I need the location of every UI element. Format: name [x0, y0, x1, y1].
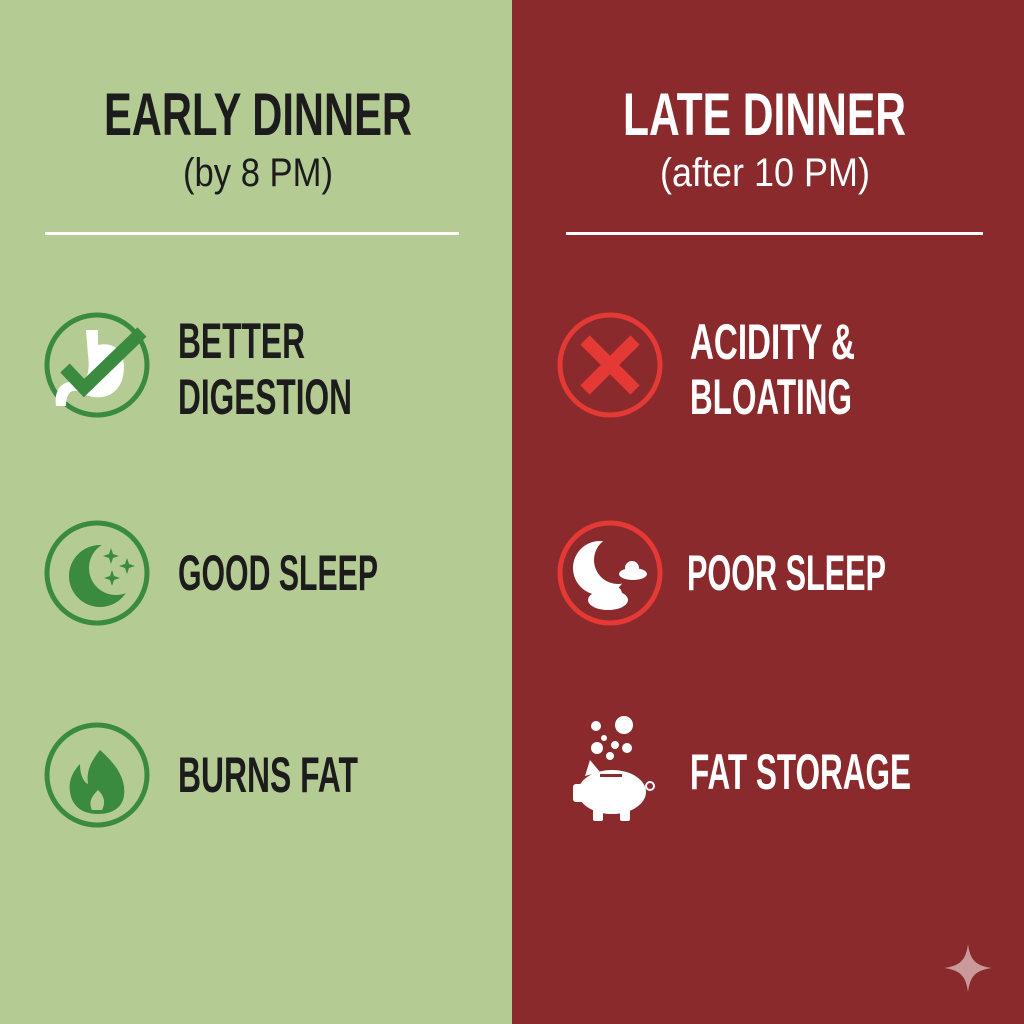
- item: poor sleep: [560, 523, 886, 623]
- text: better digestion: BETTER: [178, 313, 305, 369]
- text: good sleep: GOOD SLEEP: [178, 545, 378, 601]
- icon: piggy bank: [573, 716, 654, 821]
- title: late dinner: LATE DINNER: [623, 81, 906, 148]
- icon: sparkle: [944, 944, 992, 992]
- text: burns fat: BURNS FAT: [178, 747, 358, 803]
- item: acidity: BLOATING: [690, 369, 852, 425]
- icon: x mark: [560, 315, 660, 415]
- title: early dinner: [104, 81, 412, 195]
- icon: moon stars: [47, 523, 147, 623]
- title: early dinner: EARLY DINNER: [104, 81, 412, 148]
- panel: early dinner: [0, 0, 512, 1024]
- icon: stomach check: [47, 315, 147, 415]
- item: better digestion: DIGESTION: [178, 369, 352, 425]
- text: poor sleep: POOR SLEEP: [687, 545, 886, 601]
- item: better digestion: [47, 313, 352, 425]
- item: fat storage: [573, 716, 911, 821]
- title: late dinner: [623, 81, 906, 195]
- icon: flame: [47, 725, 147, 825]
- title: early dinner: (by 8 PM): [183, 151, 333, 195]
- panel: late dinner: [512, 0, 1024, 1024]
- title: late dinner: (after 10 PM): [660, 151, 870, 195]
- item: acidity: [560, 314, 855, 425]
- item: burns fat: [47, 725, 358, 825]
- icon: moon clouds: [560, 523, 660, 623]
- item: good sleep: [47, 523, 378, 623]
- text: acidity bloating: ACIDITY &: [690, 314, 855, 370]
